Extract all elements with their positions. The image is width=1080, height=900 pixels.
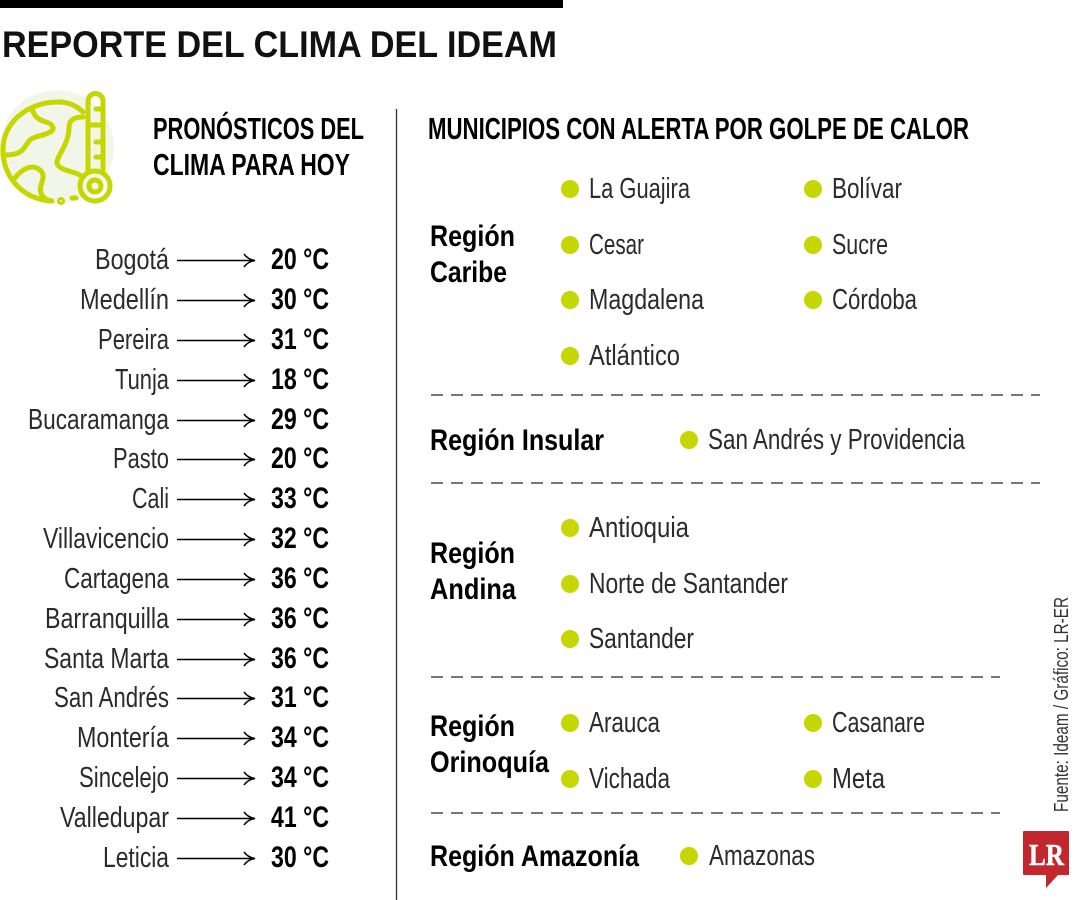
row: Medellín: Medellín	[80, 284, 169, 316]
row: Valledupar: 41 °C	[271, 801, 329, 834]
item: Antioquia	[561, 512, 690, 544]
row: Bogotá	[95, 243, 329, 276]
region label: Caribe	[430, 256, 507, 289]
panel: Región Andina	[430, 512, 788, 655]
item: Bolívar	[804, 173, 902, 205]
item: Meta: Meta	[832, 763, 886, 795]
row: Montería	[77, 721, 329, 754]
item: Magdalena	[561, 284, 705, 316]
item: Córdoba	[804, 284, 918, 316]
row: Bucaramanga: Bucaramanga	[28, 404, 170, 436]
row: Montería: 34 °C	[271, 721, 329, 754]
item: Vichada	[561, 763, 671, 795]
item: Sucre	[804, 229, 888, 261]
row: Tunja	[115, 363, 329, 396]
row: Barranquilla: Barranquilla	[45, 603, 170, 635]
row: Leticia	[103, 841, 329, 874]
item: Magdalena: Magdalena	[589, 284, 705, 316]
item: Cesar: Cesar	[589, 229, 644, 261]
row: Pasto: Pasto	[113, 443, 169, 475]
row: Cali: Cali	[132, 483, 169, 515]
row: San Andrés: 31 °C	[271, 681, 329, 714]
item: Santander: Santander	[589, 623, 694, 655]
source credit: Fuente: Ideam / Gráfico: LR-ER	[1051, 597, 1073, 812]
panel: Región Andina: Andina	[430, 573, 516, 606]
row: Barranquilla: 36 °C	[271, 602, 329, 635]
heading: forecasts: PRONÓSTICOS DEL	[153, 110, 364, 146]
row: Bogotá: 20 °C	[271, 243, 329, 276]
region label	[430, 220, 515, 289]
icon: globe with thermometer	[0, 90, 114, 204]
region label: Región	[430, 220, 515, 253]
panel: Región Orinoquía: Orinoquía	[430, 746, 549, 779]
item: Casanare	[804, 707, 925, 739]
row: San Andrés	[54, 681, 329, 714]
row: Bogotá: Bogotá	[95, 244, 170, 276]
panel: Región Insular: Región Insular	[430, 424, 604, 457]
item: Cesar	[561, 229, 644, 261]
item: San Andrés y Providencia: San Andrés y Providencia	[708, 424, 966, 456]
row: Pereira: Pereira	[98, 324, 170, 356]
panel: Región Andina: Región	[430, 537, 515, 570]
row: Pasto: 20 °C	[271, 442, 329, 475]
item: Amazonas	[680, 840, 815, 872]
row: Santa Marta: 36 °C	[271, 642, 329, 675]
row: Villavicencio	[43, 522, 329, 555]
row: Bucaramanga: 29 °C	[271, 403, 329, 436]
row: Pasto	[113, 442, 329, 475]
top black bar	[0, 0, 563, 8]
row: Medellín: 30 °C	[271, 283, 329, 316]
heading: forecasts	[153, 110, 364, 182]
row: Sincelejo	[79, 761, 329, 794]
item: Atlántico: Atlántico	[589, 340, 680, 372]
row: Barranquilla	[45, 602, 329, 635]
row: Cartagena: 36 °C	[271, 562, 329, 595]
row: Leticia: 30 °C	[271, 841, 329, 874]
item: Meta	[804, 763, 886, 795]
row: Cali: 33 °C	[271, 482, 329, 515]
item: La Guajira	[561, 173, 691, 205]
row: Pereira: 31 °C	[271, 323, 329, 356]
row: Pereira	[98, 323, 329, 356]
row: Bucaramanga	[28, 403, 329, 436]
item: Arauca: Arauca	[589, 707, 661, 739]
row: Cali	[132, 482, 329, 515]
row: Santa Marta	[44, 642, 329, 675]
row: Sincelejo: Sincelejo	[79, 762, 169, 794]
row: Sincelejo: 34 °C	[271, 761, 329, 794]
row: Cartagena: Cartagena	[64, 563, 170, 595]
item: Vichada: Vichada	[589, 763, 671, 795]
item: Antioquia: Antioquia	[589, 512, 690, 544]
row: Valledupar: Valledupar	[60, 802, 169, 834]
row: Montería: Montería	[77, 722, 170, 754]
item: Arauca	[561, 707, 661, 739]
row: Tunja: 18 °C	[271, 363, 329, 396]
row: Tunja: Tunja	[115, 364, 170, 396]
row: Leticia: Leticia	[103, 842, 170, 874]
item: Casanare: Casanare	[832, 707, 925, 739]
item: Santander	[561, 623, 694, 655]
item: La Guajira: La Guajira	[589, 173, 691, 205]
row: Medellín	[80, 283, 329, 316]
panel: city forecast list	[28, 243, 329, 874]
row: Santa Marta: Santa Marta	[44, 643, 170, 675]
item: Atlántico	[561, 340, 680, 372]
panel: Región Amazonía	[430, 840, 815, 873]
panel: Región Caribe	[430, 173, 918, 372]
row: Villavicencio: 32 °C	[271, 522, 329, 555]
panel: Región Orinoquía: Región	[430, 710, 515, 743]
panel: Región Amazonía: Región Amazonía	[430, 840, 639, 873]
logo: LR: LR	[1029, 837, 1064, 872]
logo: LR	[1023, 831, 1069, 888]
heading: forecasts: CLIMA PARA HOY	[153, 147, 350, 182]
row: Cartagena	[64, 562, 329, 595]
row: San Andrés: San Andrés	[54, 682, 169, 714]
item: Sucre: Sucre	[832, 229, 888, 261]
title: REPORTE DEL CLIMA DEL IDEAM	[2, 24, 557, 65]
row: Valledupar	[60, 801, 329, 834]
item: Bolívar: Bolívar	[832, 173, 902, 205]
panel: Región Insular	[430, 424, 966, 457]
item: Amazonas: Amazonas	[709, 840, 815, 872]
panel: Región Orinoquía	[430, 707, 925, 795]
item: Córdoba: Córdoba	[832, 284, 918, 316]
item: Norte de Santander: Norte de Santander	[589, 568, 788, 600]
row: Villavicencio: Villavicencio	[43, 523, 169, 555]
